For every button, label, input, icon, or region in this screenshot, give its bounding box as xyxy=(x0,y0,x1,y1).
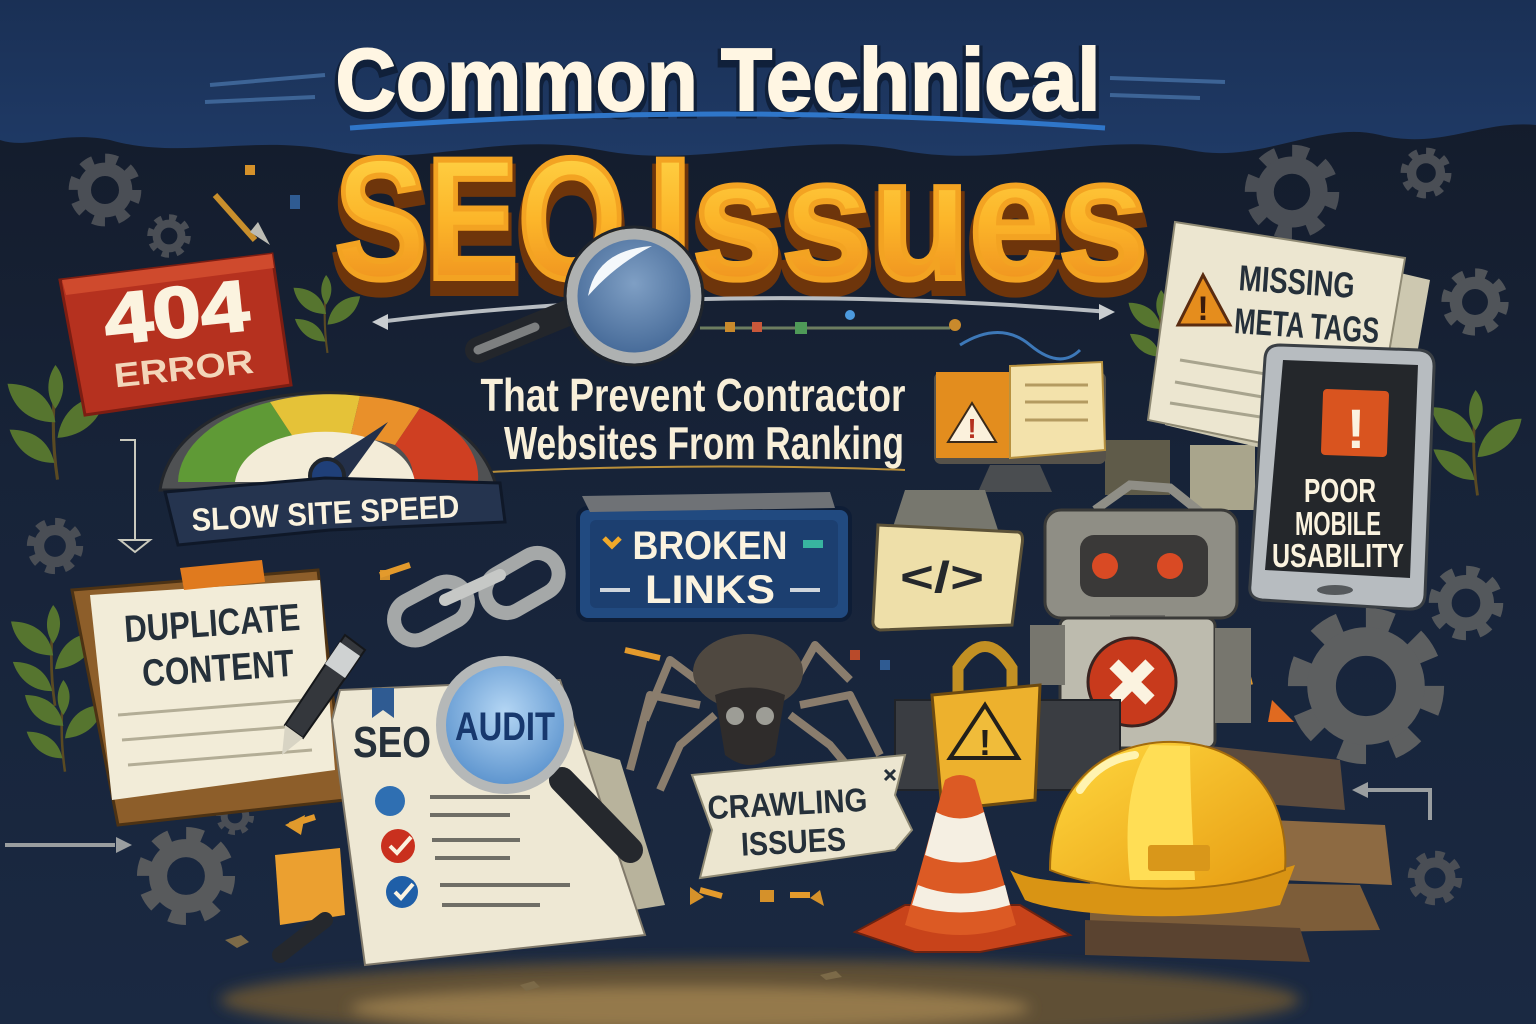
title: SEO Issues: SEO xyxy=(335,134,625,326)
icon: traffic cone xyxy=(855,775,1070,952)
small confetti marks xyxy=(5,165,1430,896)
title: SEO Issues: Issues xyxy=(648,134,1148,326)
panel: missing meta tags: META TAGS xyxy=(1233,300,1381,351)
subtitle xyxy=(480,369,906,472)
icon: title magnifying glass xyxy=(478,227,703,365)
icon: padlock with warning xyxy=(895,646,1120,810)
panel: missing meta tags: ! xyxy=(1197,290,1209,328)
leaves xyxy=(8,275,1522,772)
title: SEO Issues: SEO xyxy=(335,123,625,315)
icon: bricks xyxy=(1085,745,1392,962)
panel: code window xyxy=(873,490,1022,630)
subtitle: Websites From Ranking xyxy=(504,417,904,469)
panel: broken links: LINKS xyxy=(645,568,775,612)
icon: padlock with warning: ! xyxy=(979,722,991,763)
panel: code window: </> xyxy=(900,553,984,602)
panel: duplicate content clipboard: CONTENT xyxy=(141,643,295,695)
icon: hard hat xyxy=(1010,742,1295,916)
icon: spider xyxy=(630,634,880,790)
panel: 404 error xyxy=(60,254,291,415)
panel: poor mobile usability phone: ! xyxy=(1347,397,1365,460)
panel: missing meta tags: MISSING xyxy=(1238,257,1356,306)
panel: missing meta tags xyxy=(1148,222,1430,480)
icon: pen xyxy=(282,635,365,755)
panel: broken links xyxy=(578,492,850,620)
panel: crawling issues xyxy=(690,755,912,906)
icon: robot xyxy=(1030,485,1251,748)
panel: poor mobile usability phone xyxy=(1250,345,1434,609)
panel: duplicate content clipboard xyxy=(72,560,345,825)
background gears xyxy=(31,152,1503,917)
title: Common Technical: Common Technical xyxy=(336,30,1100,129)
panel: warning folder on monitor: ! xyxy=(967,413,977,444)
panel: crawling issues: ISSUES xyxy=(740,820,847,863)
icon: audit magnifying glass xyxy=(441,661,630,850)
panel: poor mobile usability phone: USABILITY xyxy=(1272,537,1404,574)
panel: warning folder on monitor xyxy=(934,362,1255,510)
panel: 404 error: ERROR xyxy=(112,343,255,395)
panel: slow site speed gauge: SLOW SITE SPEED xyxy=(191,488,460,538)
panel: duplicate content clipboard: DUPLICATE xyxy=(123,597,301,651)
panel: slow site speed gauge xyxy=(120,392,505,552)
subtitle: That Prevent Contractor xyxy=(480,369,906,421)
panel: poor mobile usability phone: POOR xyxy=(1304,472,1376,509)
icon: audit magnifying glass: AUDIT xyxy=(455,705,555,749)
panel: 404 error: 404 xyxy=(100,266,253,360)
panel: SEO audit report: SEO xyxy=(353,718,431,767)
panel: poor mobile usability phone: MOBILE xyxy=(1295,505,1381,542)
note and pen decorations xyxy=(275,815,345,955)
panel: SEO audit report xyxy=(332,680,665,965)
title: Common Technical: Common Technical xyxy=(336,34,1100,133)
panel: broken links: BROKEN xyxy=(632,524,788,568)
panel: crawling issues: CRAWLING xyxy=(707,781,868,826)
icon: broken chain xyxy=(387,545,566,648)
title: SEO Issues xyxy=(335,123,1148,326)
timeline arrow with dots xyxy=(372,298,1115,359)
title: SEO Issues: Issues xyxy=(648,123,1148,315)
